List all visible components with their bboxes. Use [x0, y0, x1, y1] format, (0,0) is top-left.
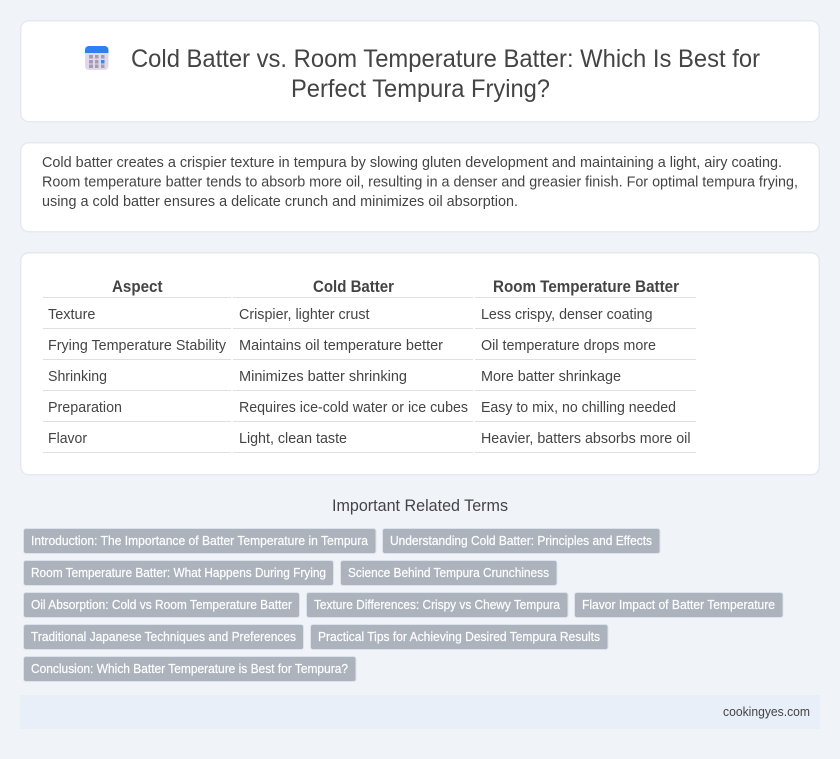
- row: texture: Crispier, lighter crust: [239, 306, 370, 323]
- row: flavor: Heavier, batters absorbs more oil: [481, 430, 690, 447]
- tag: Practical Tips for Achieving Desired Tempura Results: [318, 630, 600, 644]
- tag: Flavor Impact of Batter Temperature: [582, 598, 775, 612]
- row: shrinking: Minimizes batter shrinking: [239, 368, 407, 385]
- panel: summary text: Room temperature batter tends to absorb more oil, resulting in a denser and greasier finish. For optimal tempura frying,: [42, 174, 798, 190]
- title: Cold Batter vs. Room Temperature Batter: Which Is Best for: [131, 45, 760, 73]
- tag: Traditional Japanese Techniques and Preferences: [31, 630, 296, 644]
- row: flavor: Flavor: [48, 430, 87, 447]
- tag: Oil Absorption: Cold vs Room Temperature Batter: [31, 598, 292, 612]
- tag: [382, 528, 660, 554]
- row: frying temperature stability: Oil temperature drops more: [481, 337, 656, 354]
- tag: [310, 624, 608, 650]
- tag: Conclusion: Which Batter Temperature is Best for Tempura?: [31, 662, 348, 676]
- tag: [24, 560, 334, 586]
- tag: [24, 656, 356, 682]
- row: texture: Texture: [48, 306, 96, 323]
- panel: summary text: [21, 143, 819, 232]
- tag: Introduction: The Importance of Batter Temperature in Tempura: [31, 534, 368, 548]
- heading: important related terms: Important Related Terms: [332, 497, 508, 515]
- tag: [340, 560, 557, 586]
- tag: [24, 592, 300, 618]
- tag: [574, 592, 783, 618]
- table header: Aspect: [112, 278, 163, 296]
- row: shrinking: [48, 368, 621, 385]
- tag: [24, 624, 304, 650]
- row: texture: Less crispy, denser coating: [481, 306, 652, 323]
- icon: calendar: [85, 46, 108, 70]
- row: preparation: [48, 399, 676, 416]
- tag: [24, 528, 376, 554]
- panel: title card: [21, 21, 819, 122]
- footer bar: [20, 695, 820, 729]
- row: flavor: [48, 430, 690, 447]
- footer bar: cookingyes.com: [723, 705, 810, 719]
- row: frying temperature stability: Maintains oil temperature better: [239, 337, 443, 354]
- title: [131, 45, 760, 103]
- tag: Room Temperature Batter: What Happens During Frying: [31, 566, 326, 580]
- related term tags: [24, 528, 783, 682]
- row: shrinking: Shrinking: [48, 368, 107, 385]
- tag: Understanding Cold Batter: Principles and Effects: [390, 534, 652, 548]
- row: preparation: Preparation: [48, 399, 122, 416]
- table header: [112, 278, 680, 296]
- tag: Science Behind Tempura Crunchiness: [348, 566, 549, 580]
- row: preparation: Easy to mix, no chilling needed: [481, 399, 676, 416]
- title: Perfect Tempura Frying?: [291, 75, 550, 103]
- table header: Cold Batter: [313, 278, 395, 296]
- row: frying temperature stability: [48, 337, 656, 354]
- row: texture: [48, 306, 652, 323]
- row: preparation: Requires ice-cold water or ice cubes: [239, 399, 468, 416]
- row: flavor: Light, clean taste: [239, 430, 347, 447]
- table header: Room Temperature Batter: [493, 278, 680, 296]
- row: shrinking: More batter shrinkage: [481, 368, 621, 385]
- panel: summary text: Cold batter creates a crispier texture in tempura by slowing gluten development and maintaining a light, airy coating.: [42, 154, 782, 171]
- row: frying temperature stability: Frying Temperature Stability: [48, 337, 226, 354]
- tag: [306, 592, 568, 618]
- tag: Texture Differences: Crispy vs Chewy Tempura: [314, 598, 560, 612]
- panel: comparison table: [21, 253, 819, 475]
- panel: summary text: using a cold batter ensures a delicate crunch and minimizes oil absorption.: [42, 193, 518, 210]
